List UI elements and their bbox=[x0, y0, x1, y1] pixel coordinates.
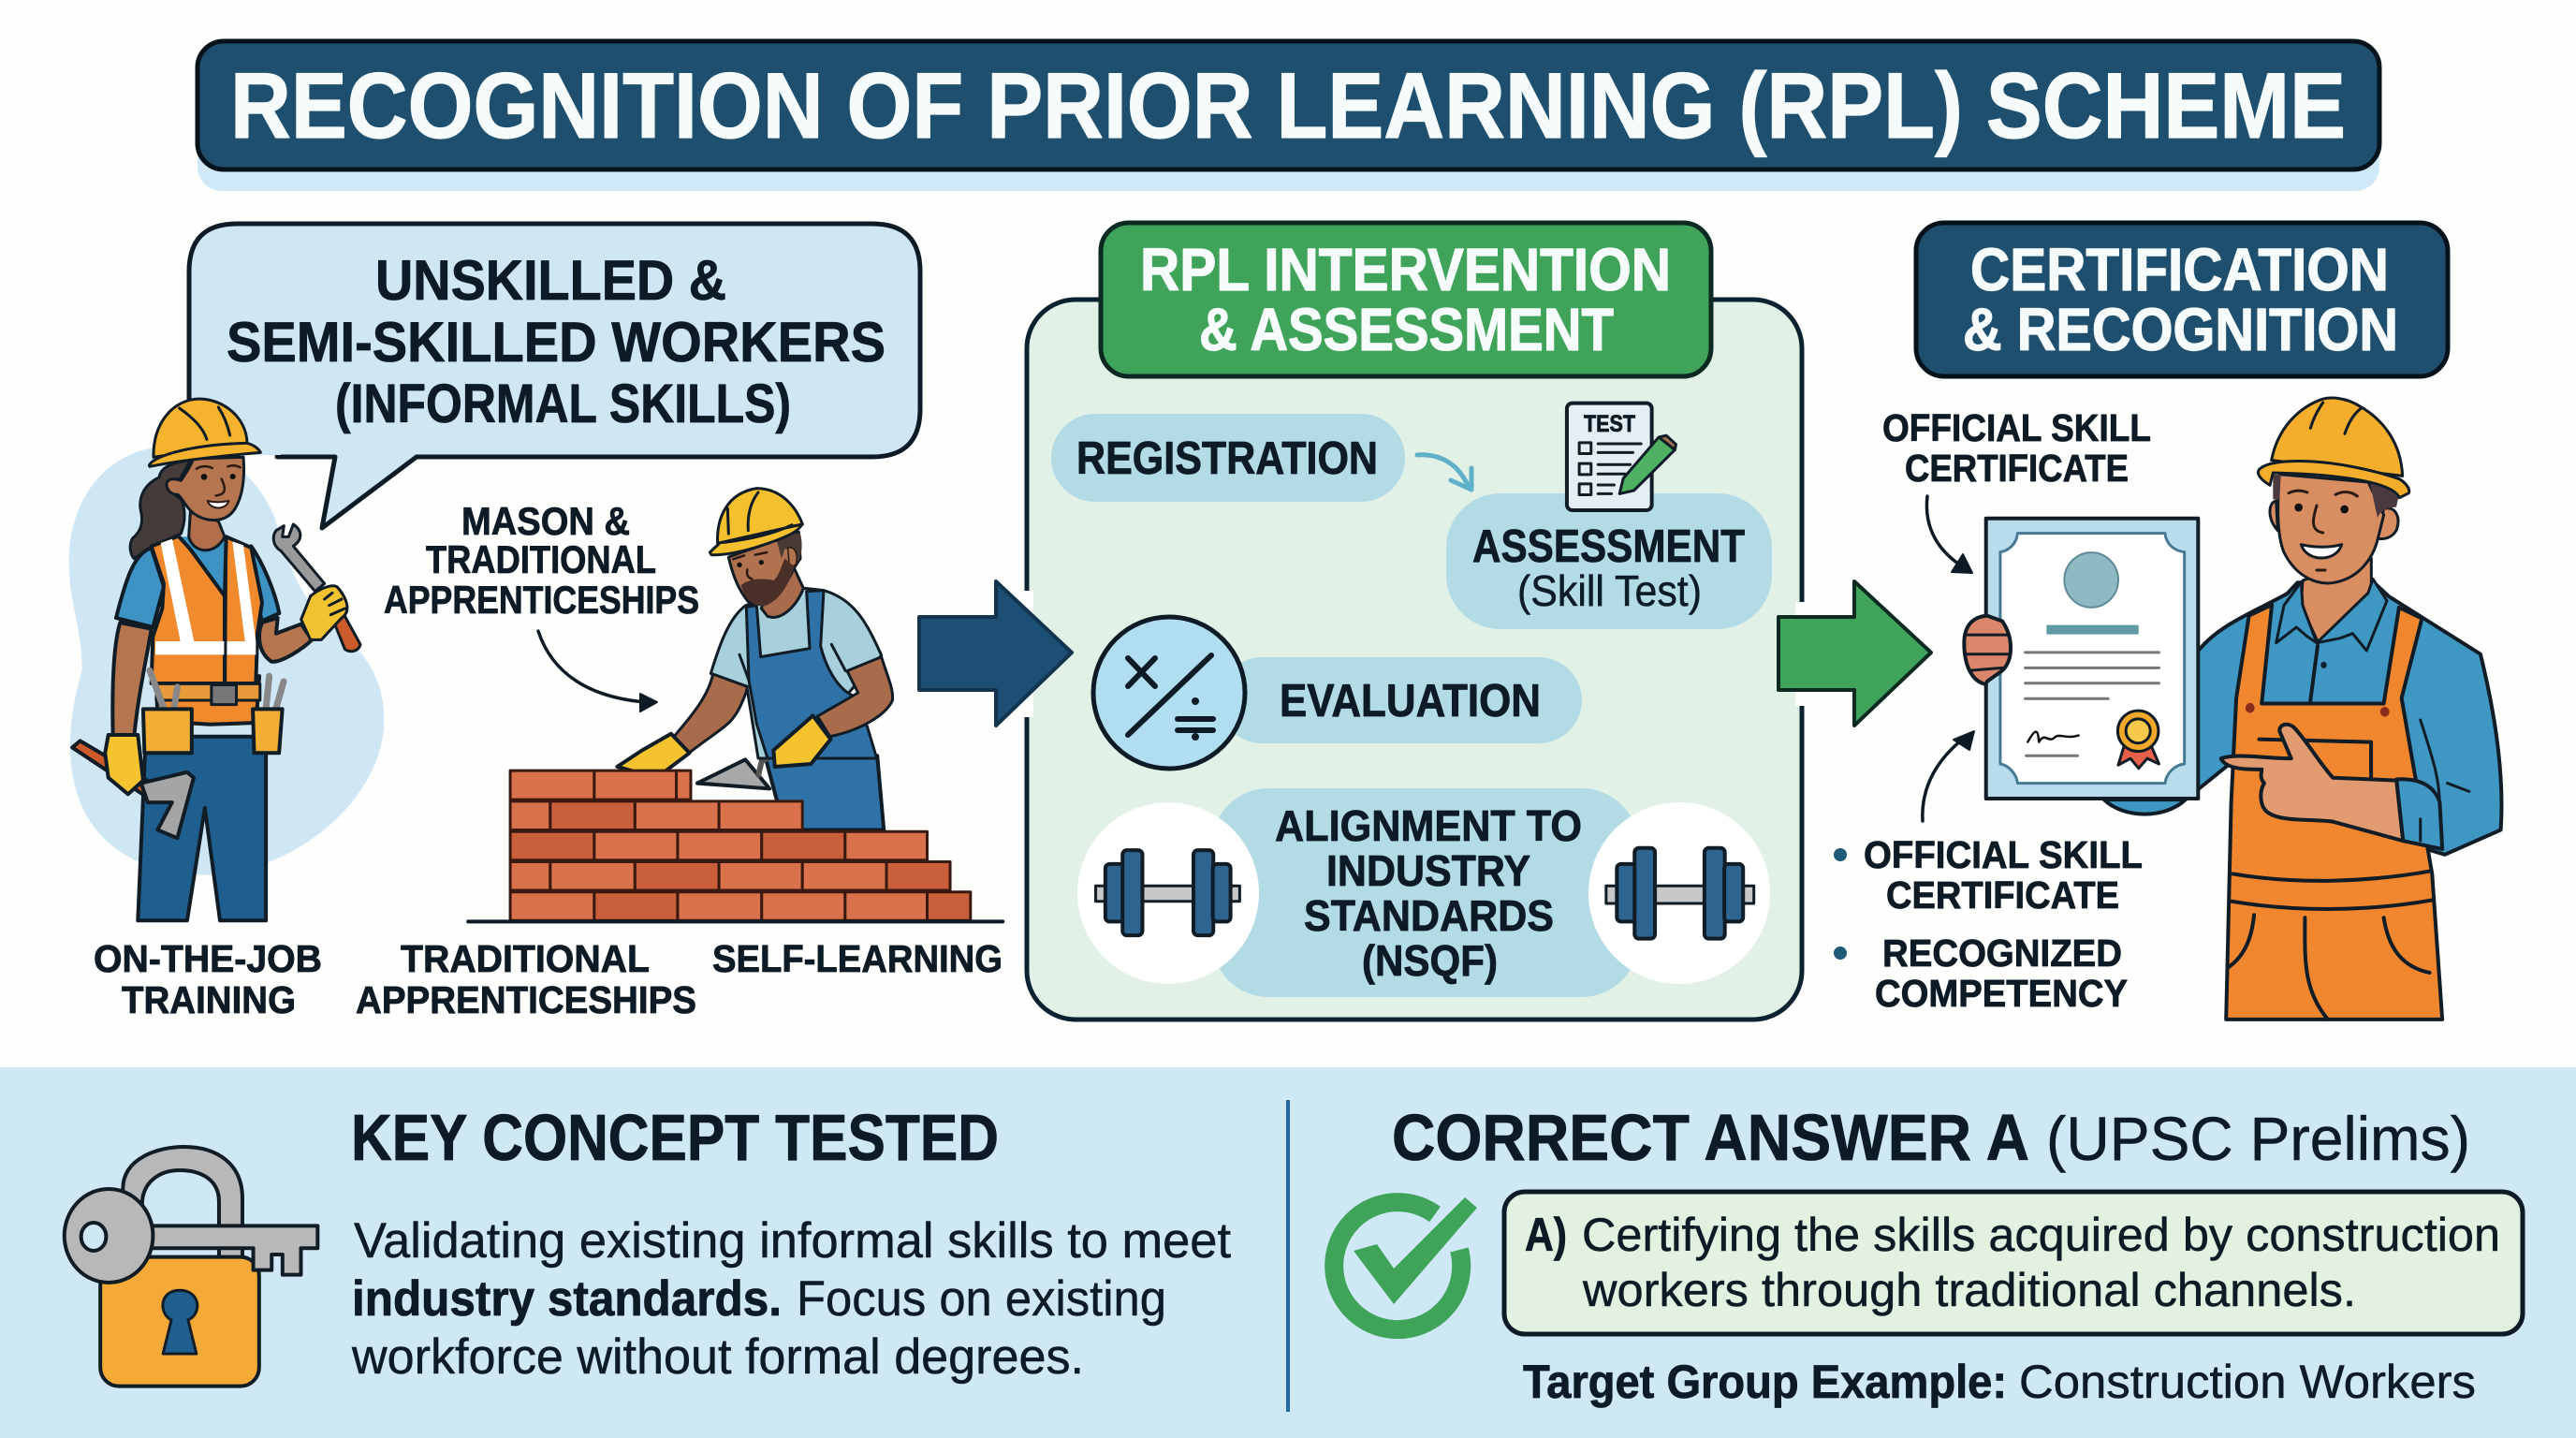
callout: answer A: workers through traditional channels. bbox=[1582, 1264, 2356, 1316]
caption: skill sources: TRAINING bbox=[122, 978, 296, 1021]
heading: certification and recognition: CERTIFICATION bbox=[1970, 236, 2389, 303]
step: alignment to industry standards: (NSQF) bbox=[1362, 936, 1498, 985]
icon: green check mark bbox=[1334, 1197, 1477, 1329]
text: target group example bbox=[1523, 1356, 2476, 1408]
step: assessment: (Skill Test) bbox=[1517, 566, 1702, 615]
panel: workers speech bubble: (INFORMAL SKILLS) bbox=[335, 374, 791, 434]
step: alignment to industry standards: STANDARDS bbox=[1304, 891, 1554, 940]
step: assessment bbox=[1446, 493, 1772, 629]
bullet list: outcomes: CERTIFICATE bbox=[1886, 873, 2119, 917]
icon: right dumbbell bbox=[1588, 802, 1770, 984]
panel heading: RPL intervention: RPL INTERVENTION bbox=[1140, 236, 1671, 303]
text: key concept tested: Validating existing informal skills to meet bbox=[354, 1213, 1231, 1269]
caption: skill sources: APPRENTICESHIPS bbox=[356, 978, 696, 1021]
panel: RPL intervention and assessment bbox=[1020, 223, 1808, 1020]
caption: skill sources bbox=[94, 937, 1003, 1021]
illustration: brick wall bbox=[468, 770, 1003, 921]
caption: skill sources: ON-THE-JOB bbox=[94, 937, 322, 980]
callout: answer A: A) bbox=[1525, 1209, 1567, 1261]
bullet list: outcomes: RECOGNIZED bbox=[1882, 932, 2122, 975]
step: alignment to industry standards: ALIGNMENT TO bbox=[1275, 801, 1582, 850]
arrow: mason label to mason bbox=[538, 631, 657, 712]
title banner bbox=[198, 41, 2379, 191]
label: mason and traditional apprenticeships: MASON & bbox=[461, 499, 630, 543]
callout: answer A bbox=[1504, 1192, 2523, 1334]
panel heading: RPL intervention: & ASSESSMENT bbox=[1199, 296, 1614, 363]
panel: workers speech bubble bbox=[189, 224, 920, 528]
title banner: RECOGNITION OF PRIOR LEARNING (RPL) SCHEME bbox=[230, 53, 2346, 157]
text: key concept tested bbox=[351, 1101, 1231, 1385]
panel: workers speech bubble: UNSKILLED & bbox=[375, 249, 726, 312]
arrow: label to certificate bbox=[1926, 496, 1972, 573]
caption: skill sources: SELF-LEARNING bbox=[712, 937, 1003, 980]
illustration: female worker with tools bbox=[69, 399, 384, 920]
heading: certification and recognition: & RECOGNITION bbox=[1963, 296, 2398, 363]
bullet list: outcomes: OFFICIAL SKILL bbox=[1864, 833, 2143, 876]
step: evaluation bbox=[1219, 657, 1582, 743]
illustration: certified worker bbox=[2104, 398, 2501, 1020]
text: key concept tested: workforce without formal degrees. bbox=[351, 1329, 1084, 1385]
icon: test paper and pencil bbox=[1567, 404, 1676, 510]
label: mason and traditional apprenticeships: TRADITIONAL bbox=[426, 537, 656, 581]
step: registration: REGISTRATION bbox=[1076, 433, 1378, 484]
heading: correct answer bbox=[1392, 1101, 2470, 1174]
illustration: mason laying bricks bbox=[617, 489, 893, 829]
heading: correct answer: (UPSC Prelims) bbox=[2046, 1104, 2470, 1173]
callout: answer A: Certifying the skills acquired by construction bbox=[1582, 1209, 2500, 1261]
icon: maths symbols circle bbox=[1093, 617, 1245, 769]
icon: left dumbbell bbox=[1077, 802, 1259, 984]
text: key concept tested: industry standards. bbox=[352, 1271, 782, 1327]
caption: skill sources: TRADITIONAL bbox=[401, 937, 650, 980]
bullet list: outcomes bbox=[1834, 833, 2143, 1015]
label: official skill certificate: CERTIFICATE bbox=[1905, 447, 2129, 490]
heading: certification and recognition bbox=[1916, 223, 2448, 376]
step: registration bbox=[1051, 414, 1405, 502]
label: mason and traditional apprenticeships bbox=[384, 499, 699, 622]
label: official skill certificate bbox=[1882, 406, 2151, 490]
text: target group example: Construction Workers bbox=[2019, 1356, 2476, 1408]
illustration: certificate document bbox=[1964, 519, 2198, 799]
label: official skill certificate: OFFICIAL SKILL bbox=[1882, 406, 2151, 449]
arrow: workers to RPL bbox=[919, 581, 1072, 726]
text: target group example: Target Group Example: bbox=[1523, 1356, 2007, 1408]
heading: correct answer: CORRECT ANSWER A bbox=[1392, 1101, 2029, 1174]
arrow: RPL to certification bbox=[1778, 581, 1931, 726]
text: key concept tested: KEY CONCEPT TESTED bbox=[351, 1101, 999, 1174]
arrow: bullets to certificate bbox=[1923, 731, 1974, 821]
panel: workers speech bubble: SEMI-SKILLED WORKERS bbox=[227, 311, 886, 374]
panel heading: RPL intervention bbox=[1101, 223, 1711, 376]
icon: lock and key bbox=[65, 1147, 317, 1387]
label: mason and traditional apprenticeships: APPRENTICESHIPS bbox=[384, 578, 699, 622]
bullet list: outcomes: COMPETENCY bbox=[1875, 972, 2128, 1015]
arrow: registration to assessment bbox=[1417, 455, 1471, 490]
step: alignment to industry standards: INDUSTRY bbox=[1326, 846, 1530, 895]
icon: test paper and pencil: TEST bbox=[1584, 411, 1635, 437]
text: key concept tested: Focus on existing bbox=[797, 1271, 1166, 1327]
step: evaluation: EVALUATION bbox=[1280, 676, 1541, 726]
step: assessment: ASSESSMENT bbox=[1472, 521, 1745, 572]
step: alignment to industry standards bbox=[1212, 788, 1638, 997]
panel: bottom band bbox=[0, 1067, 2576, 1438]
divider bbox=[1286, 1100, 1290, 1412]
